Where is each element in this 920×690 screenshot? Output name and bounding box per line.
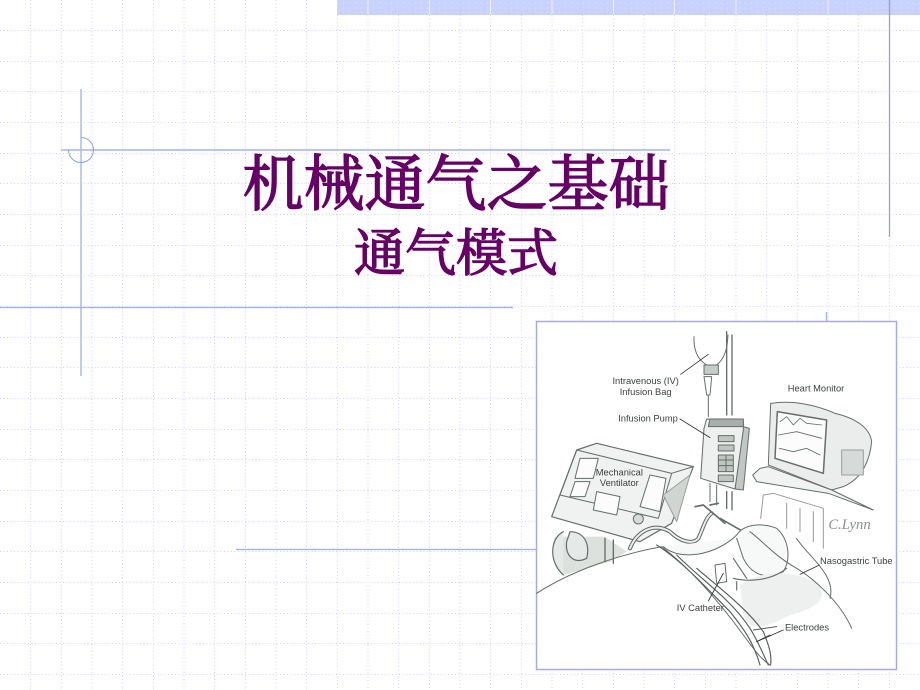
illustration labels: Infusion Bag xyxy=(620,387,672,397)
panel: medical illustration xyxy=(536,322,896,670)
icon: ventilator tubing xyxy=(630,503,743,548)
illustration labels: Heart Monitor xyxy=(788,383,844,393)
frame line: left vertical xyxy=(80,89,82,376)
illustration labels: Intravenous (IV) xyxy=(612,376,679,386)
frame line: tick above picture xyxy=(826,312,828,322)
icon: corner circle xyxy=(68,138,94,162)
icon: infusion pump xyxy=(680,419,749,505)
top right band xyxy=(337,0,920,15)
frame line: top right vertical xyxy=(888,0,890,237)
label lines xyxy=(708,565,819,642)
icon: heart monitor xyxy=(753,402,873,548)
frame line: lower rule xyxy=(236,548,537,550)
illustration labels xyxy=(596,376,893,632)
illustration labels: IV Catheter xyxy=(677,603,724,613)
icon: mechanical ventilator xyxy=(552,443,693,575)
signature: C. Lynn: C.Lynn xyxy=(828,517,871,533)
illustration labels: Nasogastric Tube xyxy=(820,556,893,566)
illustration labels: Ventilator xyxy=(600,478,639,488)
illustration labels: Infusion Pump xyxy=(618,414,678,424)
subtitle: 通气模式 xyxy=(354,227,558,283)
icon: infusion bag and pole xyxy=(681,332,732,510)
illustration labels: Mechanical xyxy=(596,467,643,477)
frame line: middle rule xyxy=(0,306,513,308)
title: 机械通气之基础 xyxy=(242,152,670,219)
illustration labels: Electrodes xyxy=(785,622,829,632)
icon: patient xyxy=(537,525,852,665)
frame line: title rule xyxy=(61,149,670,151)
